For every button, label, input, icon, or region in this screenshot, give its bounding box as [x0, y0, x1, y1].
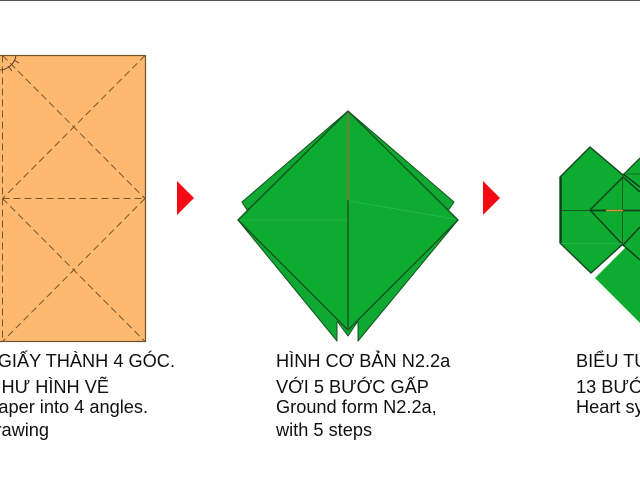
- upper left lobe: [560, 147, 623, 273]
- lower right piece: [595, 240, 640, 323]
- front diamond: [238, 111, 458, 330]
- caption: step 2: with 5 steps: [275, 420, 372, 440]
- caption: step 2: [275, 350, 451, 440]
- icon: orange crease-pattern paper: [0, 56, 146, 342]
- lower flaps: [238, 220, 458, 341]
- caption: step 3: [576, 350, 640, 417]
- icon: green diamond base form: [238, 111, 458, 341]
- back flaps: [242, 111, 454, 211]
- right lobe: [623, 158, 640, 262]
- arrow: red triangle 1: [177, 181, 194, 215]
- caption: step 2: VỚI 5 BƯỚC GẤP: [276, 376, 429, 397]
- caption: step 2: Ground form N2.2a,: [276, 397, 437, 417]
- arrow: red triangle 2: [483, 181, 500, 215]
- caption: step 2: HÌNH CƠ BẢN N2.2a: [276, 350, 451, 371]
- icon: green origami heart: [560, 147, 640, 323]
- caption: step 1: [0, 350, 175, 440]
